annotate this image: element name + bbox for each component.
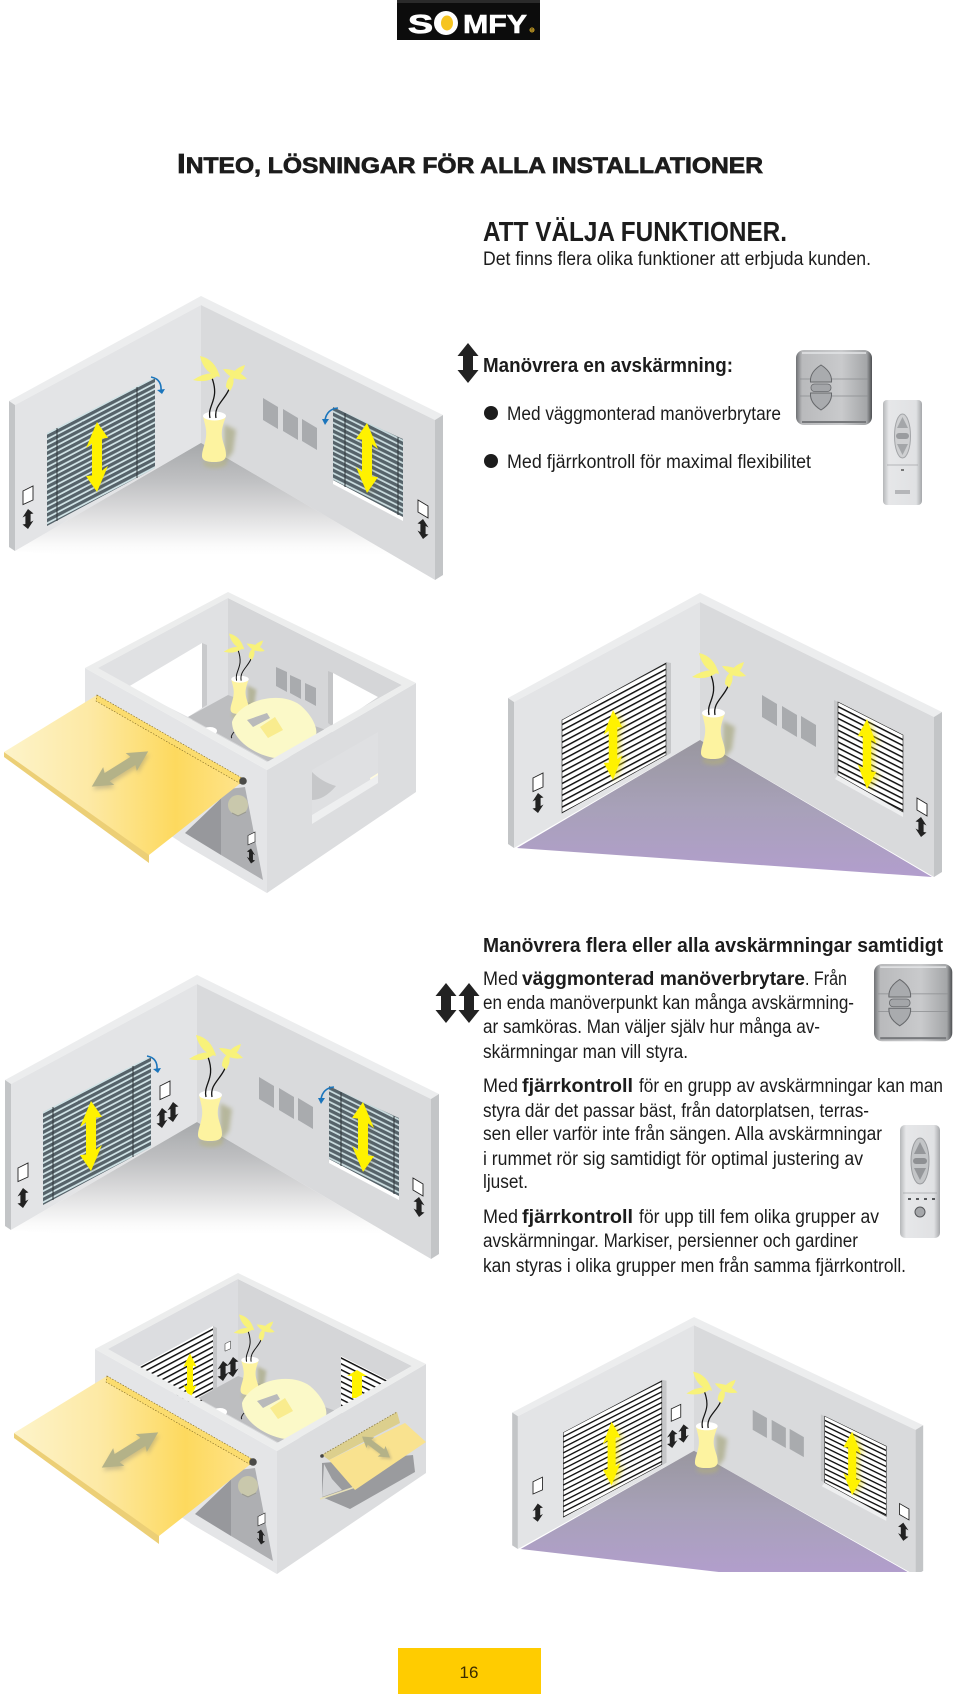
room 4: group control with venetian blinds — [5, 975, 439, 1259]
room 2: awning box — [4, 592, 416, 893]
logo: Somfy: ® — [530, 27, 534, 34]
text block: five groups: fjärrkontroll — [522, 1207, 633, 1228]
icon: group-control arrows — [436, 983, 480, 1023]
text block: remote group: Med — [483, 1076, 518, 1097]
text block: five groups: avskärmningar. Markiser, persienner och gardiner — [483, 1231, 859, 1252]
text block: remote group: ljuset. — [483, 1172, 528, 1193]
icon: single-channel arrow — [458, 343, 478, 383]
bullet list: Med fjärrkontroll för maximal flexibilitet — [507, 452, 812, 473]
bullet list — [484, 404, 812, 473]
logo: Somfy: MFY — [463, 9, 527, 39]
text block: remote group: i rummet rör sig samtidigt för optimal justering av — [483, 1149, 863, 1170]
title: INTEO, LÖSNINGAR FÖR ALLA INSTALLATIONER — [177, 148, 763, 179]
text block: remote group: sen eller varför inte från sängen. Alla avskärmningar — [483, 1124, 883, 1145]
text block: wall switch: väggmonterad manöverbrytare — [522, 969, 805, 990]
text block: remote group: fjärrkontroll — [522, 1076, 633, 1097]
logo: Somfy: O — [438, 9, 454, 39]
text block: wall switch: . Från — [805, 969, 847, 990]
icon: wall switch — [796, 350, 872, 425]
page number — [398, 1648, 541, 1694]
room 3: motorised white blinds, purple floor — [508, 593, 942, 877]
section intro: Det finns flera olika funktioner att erbjuda kunden. — [483, 249, 871, 270]
text block: wall switch: ar samköras. Man väljer själv hur många av- — [483, 1017, 820, 1038]
section heading: ATT VÄLJA FUNKTIONER. — [483, 216, 787, 247]
text block: wall switch — [483, 969, 854, 1063]
text block: five groups: för upp till fem olika grupper av — [639, 1207, 879, 1228]
room 6: group control, purple floor — [512, 1317, 923, 1580]
small awning on window — [320, 1412, 426, 1509]
room 1: interior with venetian blinds — [9, 296, 443, 580]
room 5: group control with awning and small awning — [14, 1273, 426, 1574]
icon: wall switch group — [874, 964, 952, 1041]
logo: Somfy — [397, 0, 540, 40]
text block: wall switch: Med — [483, 969, 518, 990]
text block: five groups — [483, 1207, 906, 1277]
page number: 16 — [460, 1663, 478, 1682]
text block: remote group: styra där det passar bäst, från datorplatsen, terras- — [483, 1101, 869, 1122]
text block: remote group — [483, 1076, 943, 1193]
text block: wall switch: skärmningar man vill styra. — [483, 1042, 688, 1063]
text block: wall switch: en enda manöverpunkt kan många avskärmning- — [483, 993, 854, 1014]
logo: Somfy: S — [408, 9, 433, 39]
text block: five groups: Med — [483, 1207, 518, 1228]
subheading: several blinds: Manövrera flera eller alla avskärmningar samtidigt — [483, 935, 943, 957]
icon: remote control — [883, 400, 922, 505]
icon: group remote — [900, 1125, 940, 1238]
subheading: one blind: Manövrera en avskärmning: — [483, 355, 733, 377]
bullet list: Med väggmonterad manöverbrytare — [507, 404, 781, 425]
text block: five groups: kan styras i olika grupper men från samma fjärrkontroll. — [483, 1256, 906, 1277]
